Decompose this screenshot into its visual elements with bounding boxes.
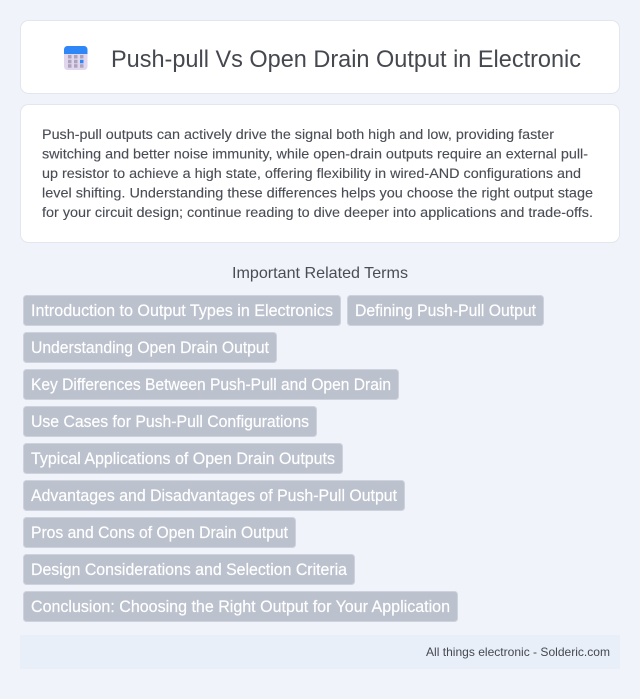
footer <box>20 635 620 669</box>
tag: defining push-pull: Defining Push-Pull Output <box>355 302 536 320</box>
tag: pros and cons: Pros and Cons of Open Drain Output <box>31 524 288 542</box>
tag: use cases <box>24 406 316 436</box>
tag: defining push-pull <box>348 296 544 326</box>
paragraph text: up resistor to achieve a high state, offering flexibility in wired-AND configurations and <box>42 166 581 182</box>
tag: understanding open drain: Understanding Open Drain Output <box>31 339 269 357</box>
tag: advantages and disadvantages <box>24 480 404 510</box>
paragraph text: Push-pull outputs can actively drive the signal both high and low, providing faster <box>42 127 554 143</box>
footer credit: All things electronic - Solderic.com <box>426 645 610 659</box>
tag: design considerations <box>24 554 354 584</box>
tag: key differences <box>24 370 398 400</box>
paragraph text: switching and better noise immunity, while open-drain outputs require an external pull- <box>42 146 588 162</box>
tag: key differences: Key Differences Between Push-Pull and Open Drain <box>31 376 391 394</box>
tag: design considerations: Design Considerations and Selection Criteria <box>31 561 347 579</box>
tag: use cases: Use Cases for Push-Pull Configurations <box>31 413 309 431</box>
title: Push-pull Vs Open Drain Output in Electronic <box>111 46 581 73</box>
panel: title card <box>20 20 620 94</box>
panel: intro paragraph <box>20 104 620 242</box>
tag: introduction <box>24 296 340 326</box>
tag: understanding open drain <box>24 332 276 362</box>
tag: conclusion: Conclusion: Choosing the Right Output for Your Application <box>31 598 450 616</box>
paragraph text: for your circuit design; continue reading to dive deeper into applications and trade-offs. <box>42 205 593 221</box>
heading: related terms: Important Related Terms <box>232 265 408 282</box>
tag: typical applications <box>24 444 342 474</box>
icon: calendar <box>64 46 88 70</box>
tag: advantages and disadvantages: Advantages and Disadvantages of Push-Pull Output <box>31 487 397 505</box>
tag: conclusion <box>24 592 458 622</box>
tag: introduction: Introduction to Output Types in Electronics <box>31 302 333 320</box>
panel: term tags <box>24 296 544 622</box>
tag: pros and cons <box>24 518 296 548</box>
paragraph text <box>42 127 593 221</box>
paragraph text: level shifting. Understanding these differences helps you choose the right output stage <box>42 186 593 202</box>
tag: typical applications: Typical Applications of Open Drain Outputs <box>31 450 335 468</box>
